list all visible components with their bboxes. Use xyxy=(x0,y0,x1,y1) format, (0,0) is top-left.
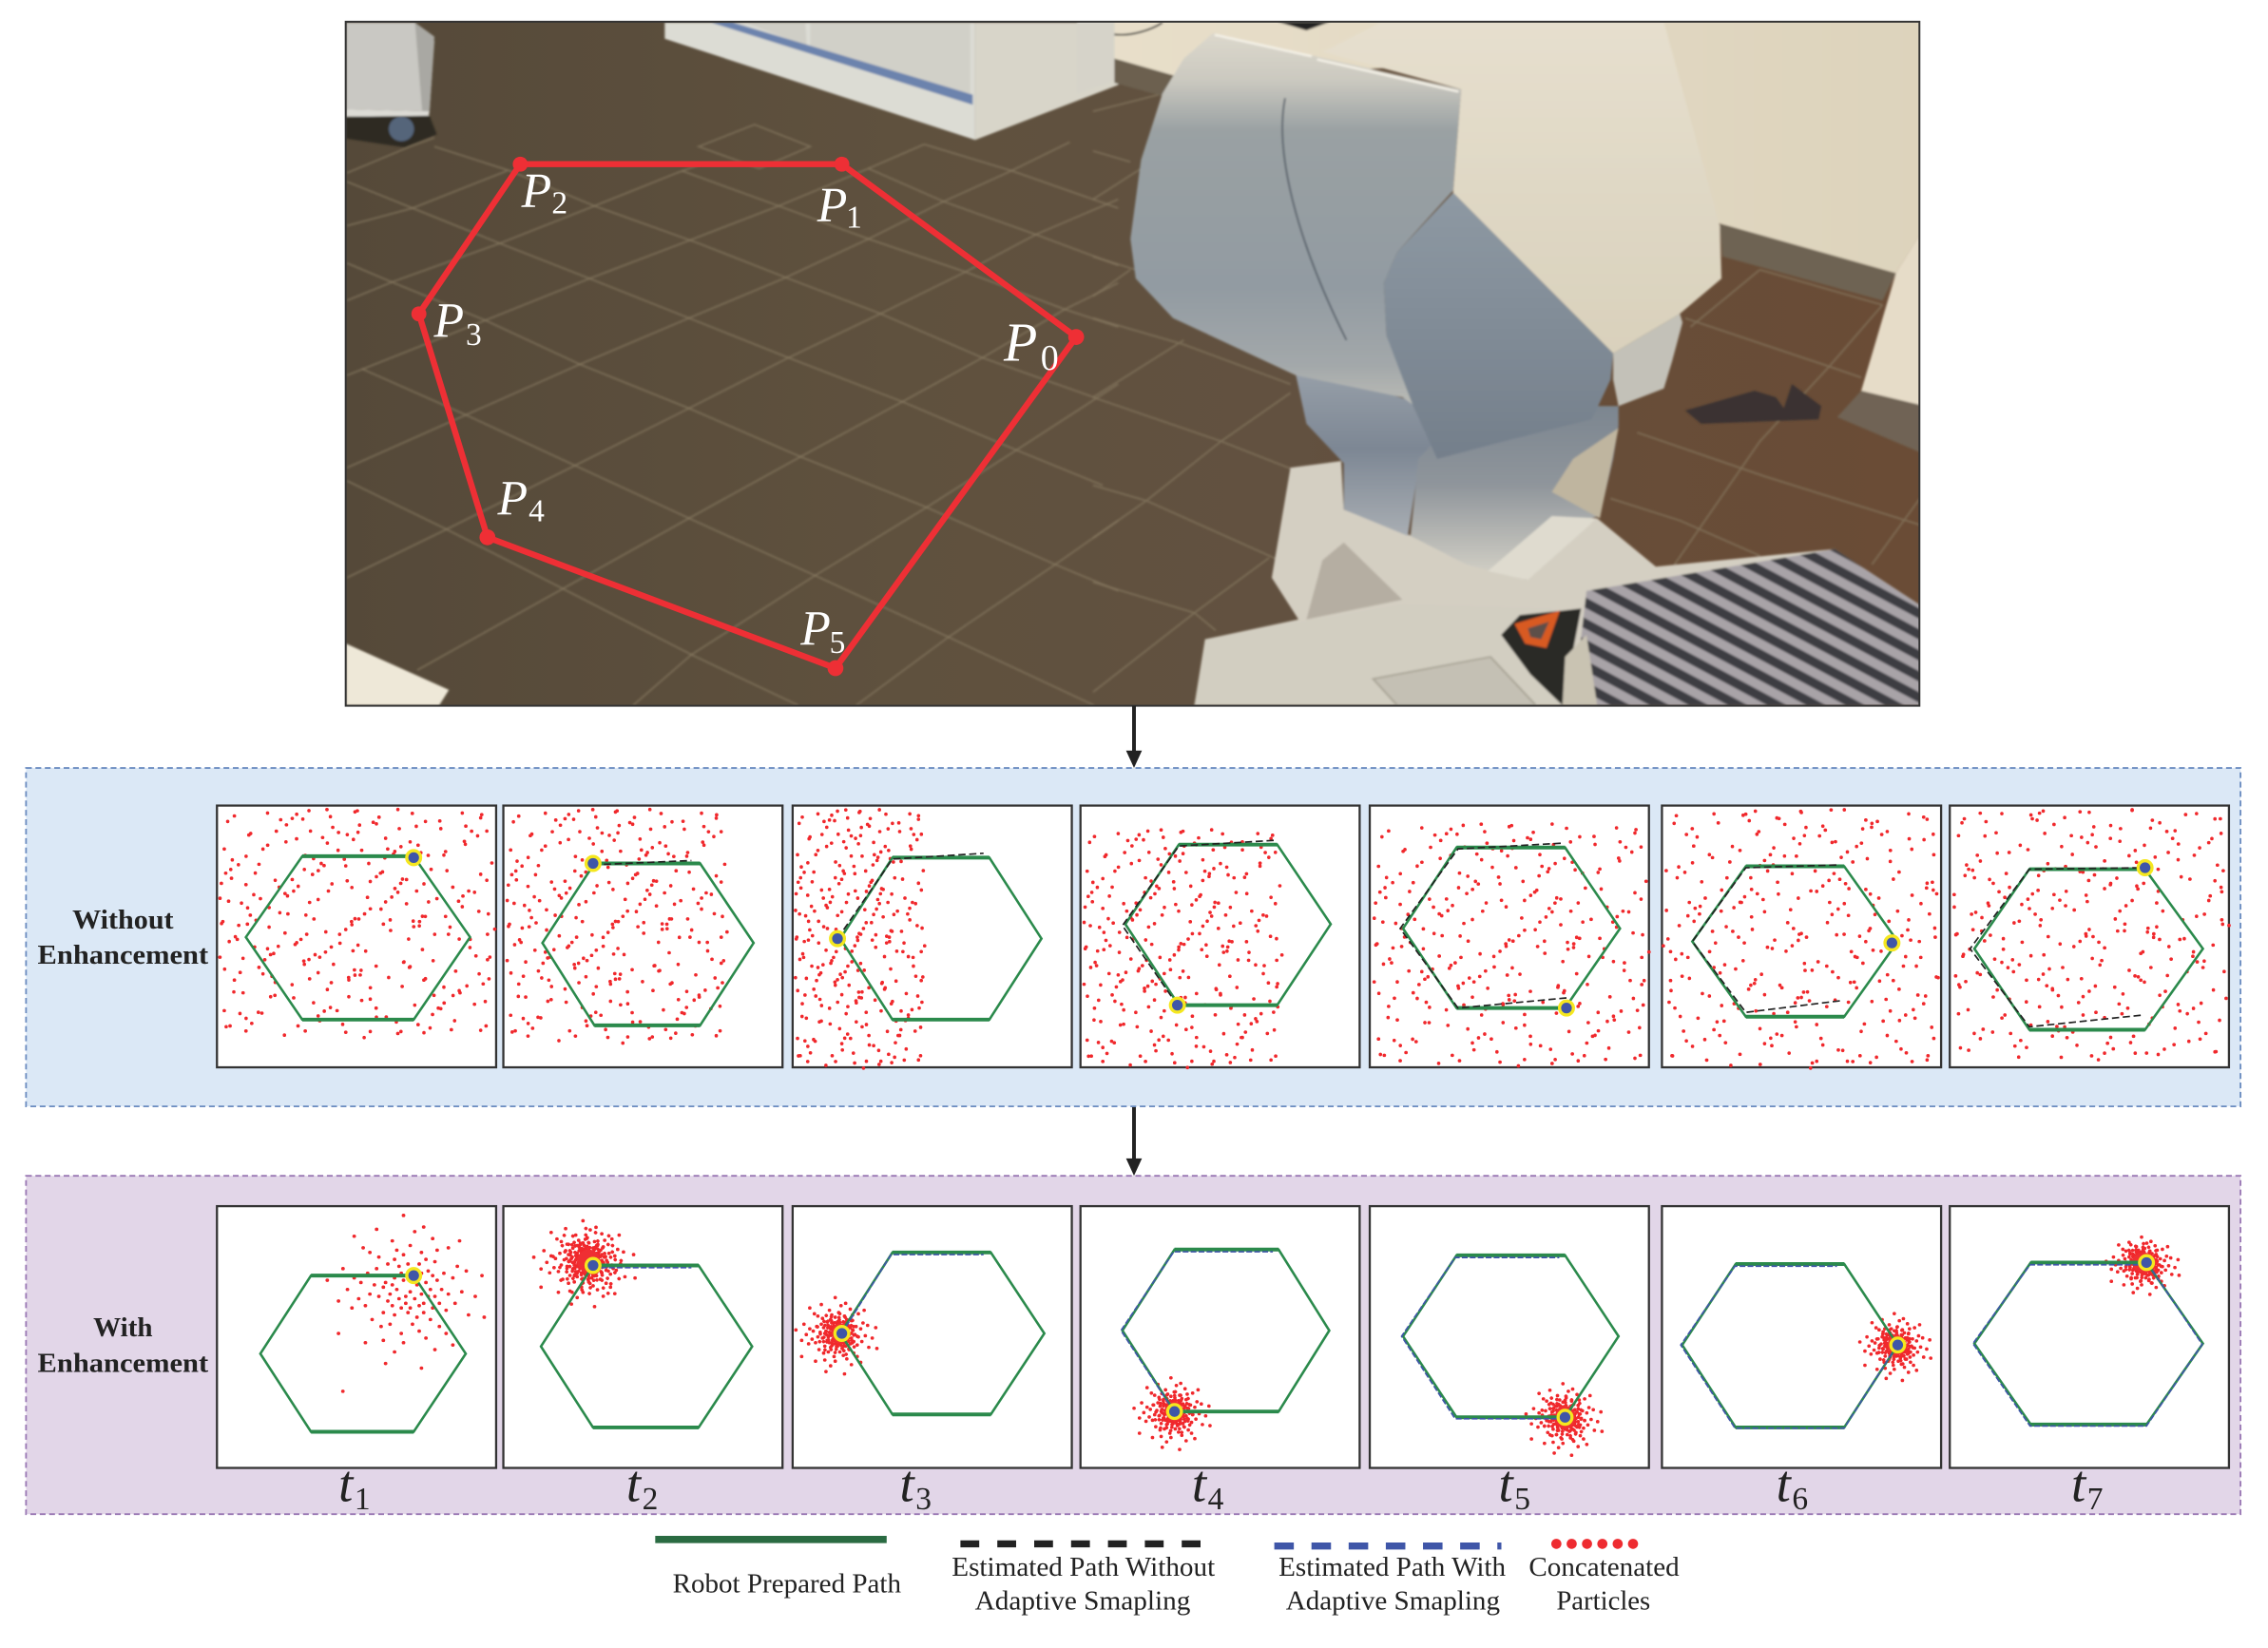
time label t7: t xyxy=(2071,1455,2085,1513)
plot: with enhancement t7 xyxy=(1950,1206,2229,1468)
arrow: photo to without-enhancement panel xyxy=(1126,706,1142,768)
plot: with enhancement t6 xyxy=(1662,1206,1941,1468)
time label t5: t xyxy=(1498,1455,1513,1513)
plot: with enhancement t4 xyxy=(1081,1206,1359,1468)
legend: estimated path with adaptive sampling xyxy=(1275,1546,1506,1617)
legend: concatenated particles: Particles xyxy=(1556,1587,1650,1617)
label: P3: P xyxy=(434,295,464,349)
time label t1: t xyxy=(338,1455,353,1513)
plot: without enhancement t2 xyxy=(504,806,782,1067)
plot: with enhancement t2 xyxy=(504,1206,782,1468)
legend: estimated path without adaptive sampling: Estimated Path Without xyxy=(951,1553,1215,1582)
time label t3: t xyxy=(899,1455,914,1513)
time label t6: t xyxy=(1777,1455,1791,1513)
plot: without enhancement t7 xyxy=(1950,806,2229,1067)
label: P5: P xyxy=(800,603,831,657)
plot: without enhancement t1 xyxy=(217,806,496,1067)
time label t1: 1 xyxy=(355,1482,371,1517)
time label t2: t xyxy=(626,1455,641,1513)
label: P2: P xyxy=(522,164,551,219)
time label t6: 6 xyxy=(1792,1482,1808,1517)
label: P0: 0 xyxy=(1041,338,1059,378)
legend: concatenated particles xyxy=(1528,1539,1680,1617)
legend: estimated path with adaptive sampling: Estimated Path With xyxy=(1278,1553,1506,1582)
time label t2: 2 xyxy=(643,1482,658,1517)
label: P2: 2 xyxy=(551,185,567,220)
row label: without enhancement: Without xyxy=(72,906,174,935)
label: P1: 1 xyxy=(846,201,862,236)
plot: without enhancement t3 xyxy=(793,806,1072,1068)
label: P5: 5 xyxy=(830,625,845,661)
panel: without enhancement xyxy=(26,768,2240,1106)
photo: robot arm with waypoint path on tiled floor xyxy=(346,19,1925,706)
panel: with enhancement xyxy=(26,1176,2240,1517)
path: red waypoint polygon P0 to P5 xyxy=(412,157,1085,676)
time label t3: 3 xyxy=(915,1482,932,1517)
row label: with enhancement: With xyxy=(93,1313,153,1343)
label: P4: P xyxy=(497,472,528,527)
label: P0: P xyxy=(1004,312,1037,374)
time label t4: t xyxy=(1192,1455,1206,1513)
time label t4: 4 xyxy=(1208,1482,1224,1517)
time label t5: 5 xyxy=(1514,1482,1530,1517)
legend: concatenated particles: Concatenated xyxy=(1528,1553,1680,1582)
row label: without enhancement: Enhancement xyxy=(38,941,209,970)
legend: estimated path without adaptive sampling: Adaptive Smapling xyxy=(975,1587,1190,1617)
label: P1: P xyxy=(817,179,847,233)
plot: with enhancement t5 xyxy=(1370,1206,1649,1468)
plot: without enhancement t4 xyxy=(1081,806,1359,1067)
plot: with enhancement t3 xyxy=(793,1206,1072,1468)
legend: estimated path with adaptive sampling: Adaptive Smapling xyxy=(1286,1587,1500,1617)
label: P4: 4 xyxy=(529,494,545,529)
row label: with enhancement: Enhancement xyxy=(38,1349,209,1378)
plot: without enhancement t6 xyxy=(1662,806,1941,1068)
arrow: without-enhancement to with-enhancement panel xyxy=(1126,1106,1142,1176)
plot: without enhancement t5 xyxy=(1370,806,1649,1067)
label: P3: 3 xyxy=(466,317,482,353)
plot: with enhancement t1 xyxy=(217,1206,496,1468)
legend: robot prepared path: Robot Prepared Path xyxy=(673,1569,901,1599)
legend: estimated path without adaptive sampling xyxy=(951,1543,1215,1617)
legend xyxy=(655,1539,1680,1617)
time label t7: 7 xyxy=(2087,1482,2104,1517)
